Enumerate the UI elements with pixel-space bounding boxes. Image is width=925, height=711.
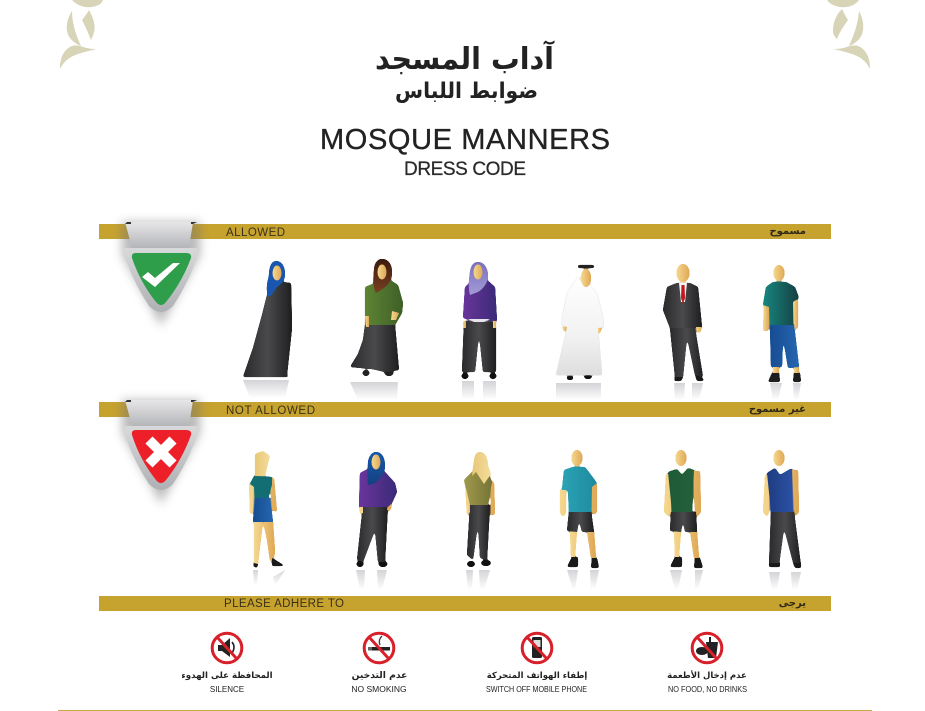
figure: woman in purple top with blue hijab [356,452,397,567]
label: no smoking: عدم التدخين [352,670,407,681]
label: silence: المحافظة على الهدوء [181,671,273,681]
icon: silence [212,633,242,663]
label: no food, no drinks [667,670,747,694]
band: not allowed: غير مسموح [749,404,806,415]
label: no smoking: NO SMOKING [351,684,407,694]
band: not allowed [99,402,831,417]
label: silence [181,671,273,694]
band: not allowed: NOT ALLOWED [226,405,315,417]
band: please adhere to [99,596,831,611]
icon: no food, no drinks [692,633,722,663]
figure: man in aqua t-shirt and shorts [560,450,599,568]
figure: woman in green top and skirt [350,259,403,376]
badge: allowed check [122,222,200,326]
figure: man in teal t-shirt and capri trousers [763,265,801,382]
band: allowed: ALLOWED [226,227,285,239]
band: please adhere to: PLEASE ADHERE TO [224,598,344,610]
arabic title: آداب المسجد [375,40,555,77]
badge: not allowed cross [122,400,200,504]
row: allowed figures [243,259,801,400]
reflections: allowed [243,380,801,400]
figure: woman in purple top and trousers [462,262,497,379]
band: allowed: مسموح [769,226,806,237]
figure: woman in olive top with blond hair [464,452,495,567]
label: no smoking [351,670,407,694]
ornament: top right [827,0,870,69]
figure: woman in teal top and blue skirt [249,451,285,568]
label: switch off mobile phone: SWITCH OFF MOBILE PHONE [486,684,587,694]
figure: man in green vest and shorts [664,450,703,568]
reflections: not allowed [253,570,801,590]
label: switch off mobile phone: إطفاء الهواتف المتحركة [487,671,587,681]
arabic subtitle: ضوابط اللباس [395,79,538,104]
label: switch off mobile phone [486,671,587,694]
band: allowed [99,224,831,239]
icon: switch off mobile phone [522,633,552,663]
subtitle: DRESS CODE [404,159,526,180]
row: not allowed figures [249,450,801,590]
label: no food, no drinks: NO FOOD, NO DRINKS [668,684,747,694]
band: please adhere to: يرجى [779,598,806,609]
figure: woman in abaya [243,261,292,377]
figure: man in white thobe [556,265,604,380]
label: silence: SILENCE [210,685,244,694]
icon: no smoking [364,633,394,663]
figure: man in suit [663,264,704,381]
title: MOSQUE MANNERS [320,124,610,156]
ornament: top left [60,0,103,69]
figure: man in blue vest and trousers [763,450,801,568]
label: no food, no drinks: عدم إدخال الأطعمة [667,670,747,681]
